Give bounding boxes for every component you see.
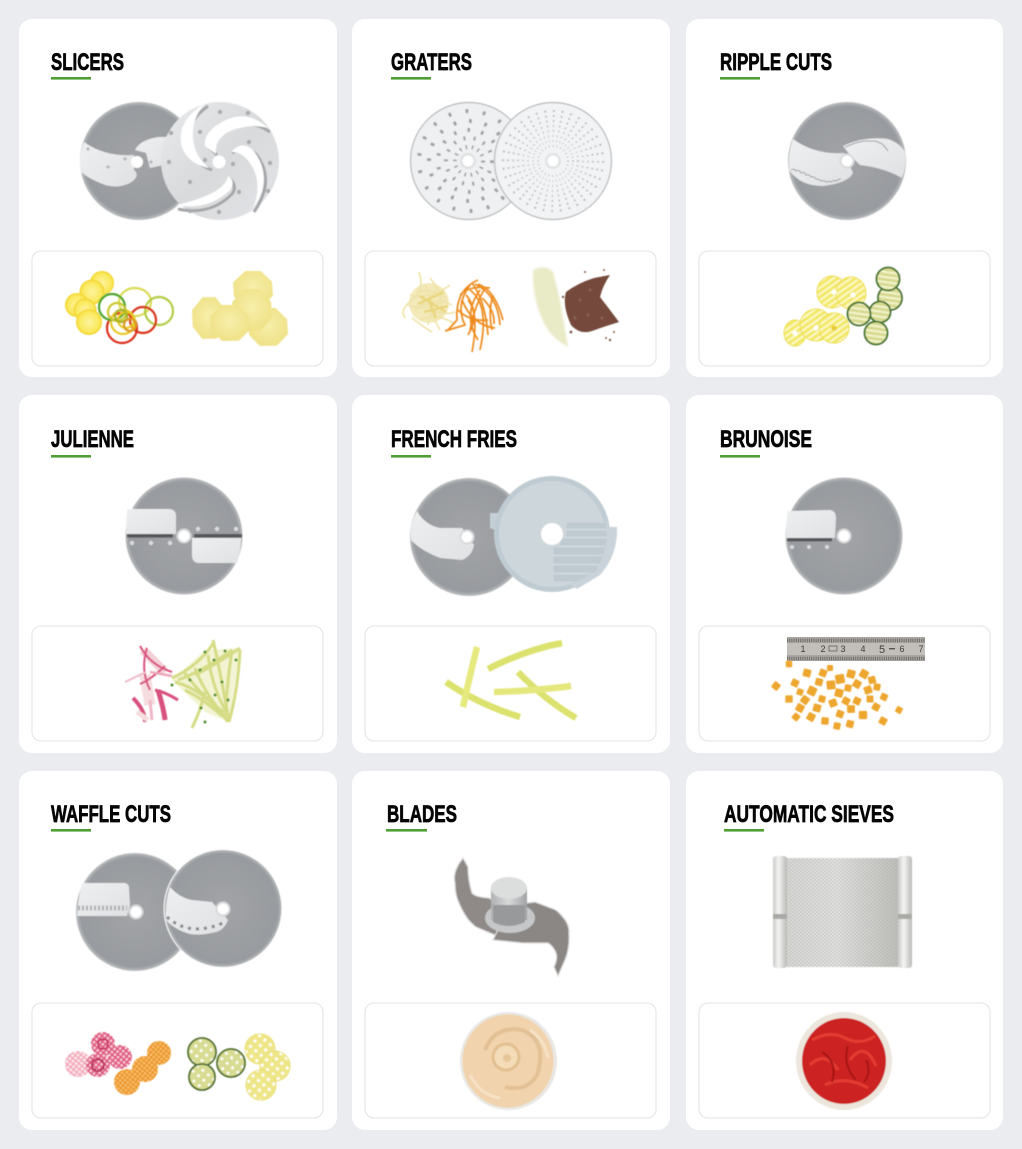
heading: ripple cuts: RIPPLE CUTS [720,49,832,76]
heading: julienne [51,426,134,458]
panel: waffle cuts [19,771,337,1130]
ruler: 2 [820,644,826,654]
box: waffle cut food [32,1003,323,1118]
heading: brunoise: BRUNOISE [720,426,812,453]
icon: brunoise disc [786,478,902,594]
box: brunoise food [699,626,990,741]
ruler [787,637,925,661]
food: ripple zucchini slices [848,268,902,344]
panel: graters [352,19,670,377]
food: waffle zucchini slices [188,1038,245,1090]
heading: waffle cuts [51,801,171,832]
icon: french fry slicing disc [410,478,528,596]
heading: slicers [51,49,124,80]
icon: spiral slicer disc [161,102,279,220]
heading: julienne: JULIENNE [51,426,134,453]
icon: waffle disc with straight blade [76,853,194,971]
box: sliced food [32,251,323,366]
heading: graters: GRATERS [391,49,472,76]
ruler: 1 [800,644,806,654]
ruler: 6 [899,644,905,654]
panel: brunoise [686,395,1003,753]
food: bowl of tomato sauce [796,1012,892,1110]
heading: graters [391,49,472,80]
food: ground chocolate [562,269,619,341]
box: julienne food [32,626,323,741]
food: bowl of hummus [460,1012,557,1110]
heading: waffle cuts: WAFFLE CUTS [51,801,171,828]
box: blended food [365,1003,656,1118]
heading: french fries [391,426,517,458]
food: waffle carrot slices [114,1041,171,1095]
panel: slicers [19,19,337,377]
icon: S blade [454,858,569,976]
icon: julienne disc [126,478,242,594]
food: radish julienne [125,646,178,722]
ruler: 4 [860,644,866,654]
heading: blades [386,801,457,832]
ruler: 3 [840,644,846,654]
heading: ripple cuts [720,49,832,80]
food: fries [446,643,576,718]
food: potato slices [192,271,288,346]
box: grated food [365,251,656,366]
heading: slicers: SLICERS [51,49,124,76]
panel: french fries [352,395,670,753]
food: lemon slices [65,271,114,335]
heading: brunoise [720,426,812,458]
ruler: 7 [918,644,924,654]
food: grated carrot [445,280,503,352]
food: grated pale vegetable [533,267,568,347]
heading: automatic sieves: AUTOMATIC SIEVES [724,801,894,828]
panel: blades [352,771,670,1130]
food: pepper rings [99,288,173,343]
heading: blades: BLADES [387,801,457,828]
food: waffle potato slices [245,1034,290,1100]
icon: fine grater disc [494,102,612,220]
box: ripple cut food [699,251,990,366]
icon: ripple cut disc [788,102,906,220]
panel: julienne [19,395,337,753]
heading: french fries: FRENCH FRIES [391,426,517,453]
food: grated cheese [403,272,455,332]
box: sieved food [699,1003,990,1118]
food: ripple potato slices [784,276,866,346]
icon: french fry grid disc [490,476,617,592]
icon: coarse grater disc [410,102,528,220]
panel: ripple cuts [686,19,1003,377]
icon: waffle disc with curved blade [164,850,282,968]
icon: sieve drum [773,856,912,968]
panel: automatic sieves [686,771,1003,1130]
ruler: 5 [879,644,885,656]
icon: flat slicer disc [80,102,198,220]
box: french fries food [365,626,656,741]
food: zucchini julienne [170,640,240,728]
food: waffle beet slices [65,1032,132,1077]
food: diced cubes [771,661,903,730]
